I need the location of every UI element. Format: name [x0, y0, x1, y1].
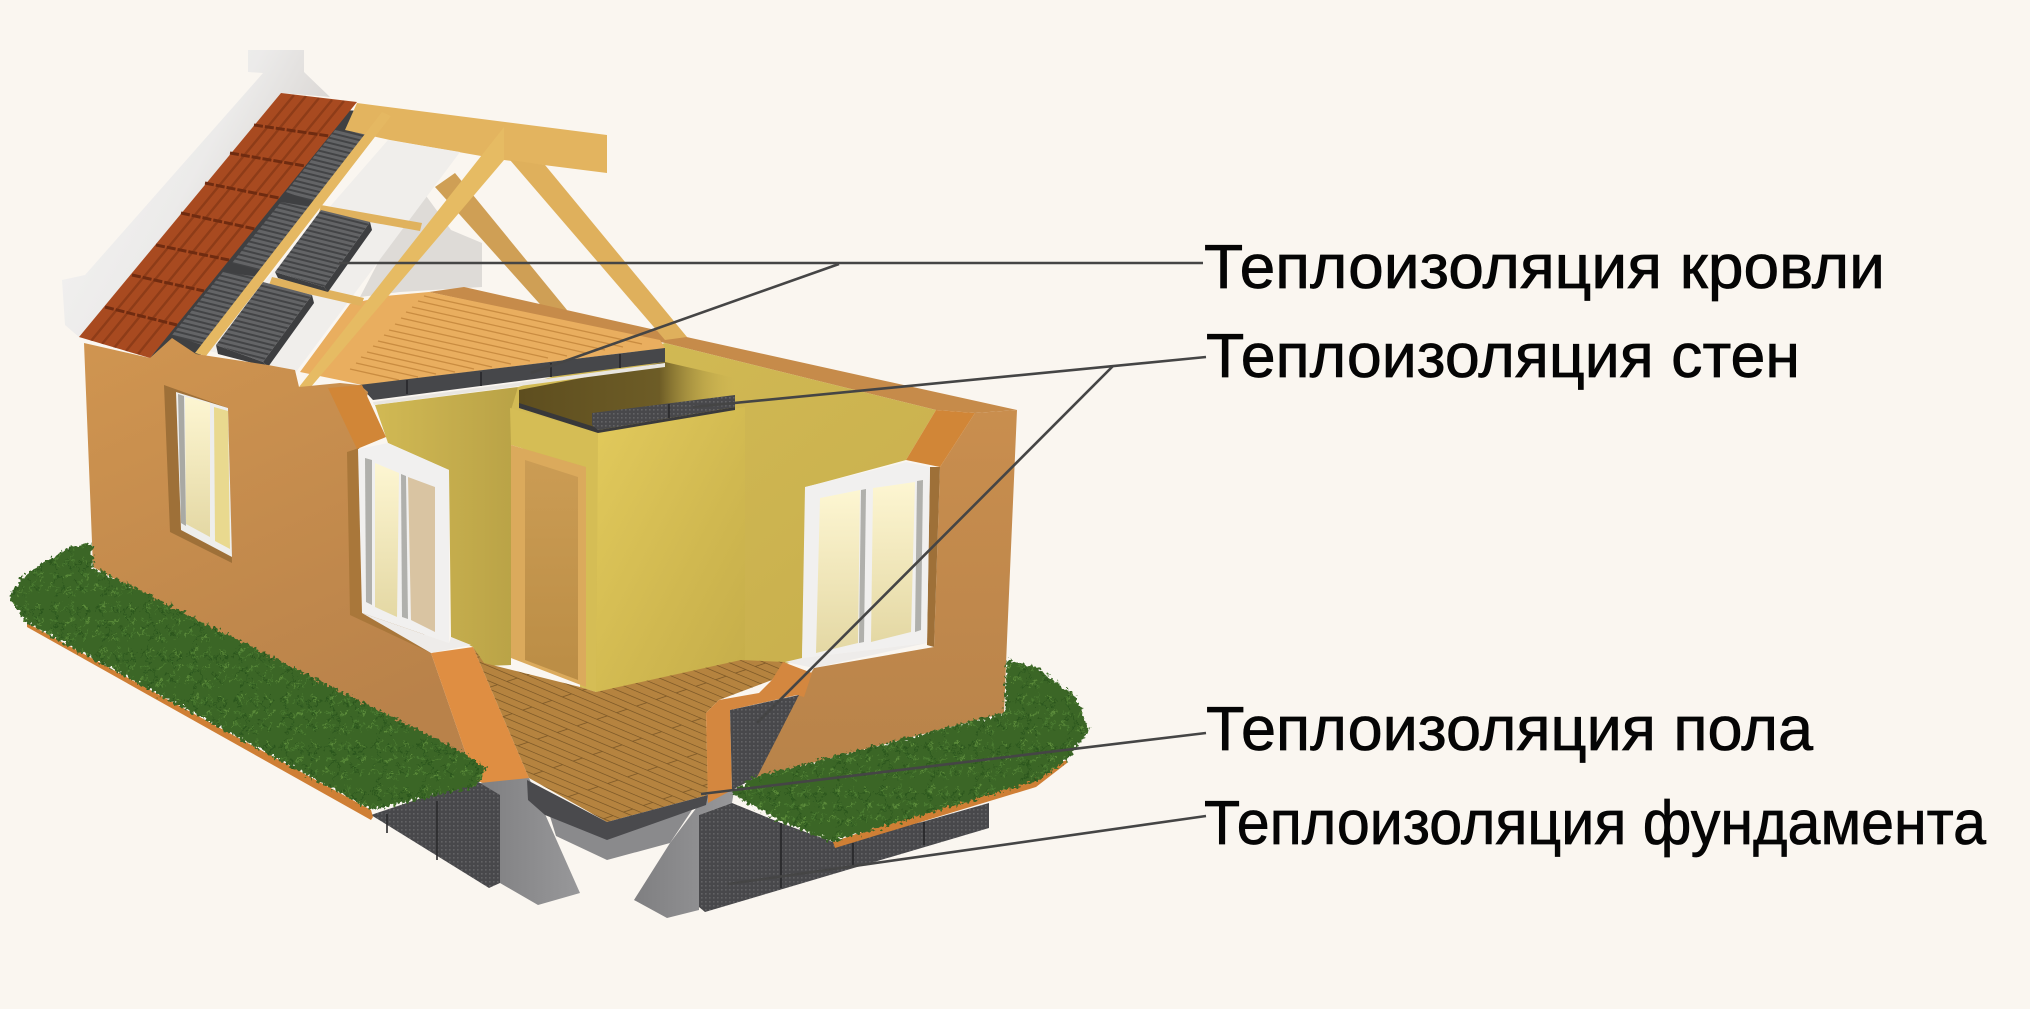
attic floor boards — [300, 292, 665, 385]
rear gable wall — [360, 193, 482, 297]
right concrete footing — [634, 785, 735, 918]
leader line: foundation insulation — [728, 816, 1206, 884]
white membrane — [205, 140, 460, 372]
right grass — [732, 660, 1089, 842]
ground floor boards — [473, 647, 785, 822]
chimney and white gable wall — [62, 50, 330, 337]
partition wall top insulation — [519, 395, 735, 433]
left concrete footing — [480, 778, 580, 905]
back roof batts — [172, 130, 376, 346]
label: floor insulation: Теплоизоляция пола — [1206, 695, 1814, 764]
right lawn base — [833, 760, 1067, 848]
rear rafter — [435, 173, 567, 312]
rafters — [195, 112, 687, 388]
leader line: floor insulation — [701, 733, 1206, 794]
rear wall top band — [429, 287, 1017, 413]
leader line: roof insulation — [339, 263, 1203, 373]
battens — [269, 205, 422, 306]
right wall cut section — [906, 410, 975, 467]
partition wall with door — [510, 407, 745, 692]
left foundation insulation — [371, 780, 500, 888]
roof tiles — [79, 93, 357, 358]
right foundation insulation — [699, 803, 989, 912]
label: roof insulation: Теплоизоляция кровли — [1204, 233, 1885, 302]
ridge beam — [345, 103, 607, 173]
interior yellow walls — [375, 343, 936, 692]
roof cavity behind rafter — [150, 110, 388, 358]
far window — [164, 385, 232, 563]
left wall cut sections — [328, 385, 529, 788]
right window — [785, 462, 940, 668]
left exterior wall — [84, 338, 475, 780]
ceiling insulation — [359, 348, 665, 405]
leader line: wall insulation — [693, 357, 1206, 723]
floor insulation and slab — [527, 780, 708, 860]
house cutaway illustration — [9, 50, 1089, 918]
right wall bricks — [706, 662, 812, 803]
right exterior wall — [755, 410, 1017, 778]
near window — [347, 443, 471, 653]
left grass — [9, 543, 487, 810]
label: foundation insulation: Теплоизоляция фундамента — [1204, 789, 1986, 858]
front roof batts — [216, 210, 372, 367]
label: wall insulation: Теплоизоляция стен — [1206, 322, 1800, 391]
wall insulation — [730, 695, 799, 790]
left lawn base — [27, 623, 373, 820]
